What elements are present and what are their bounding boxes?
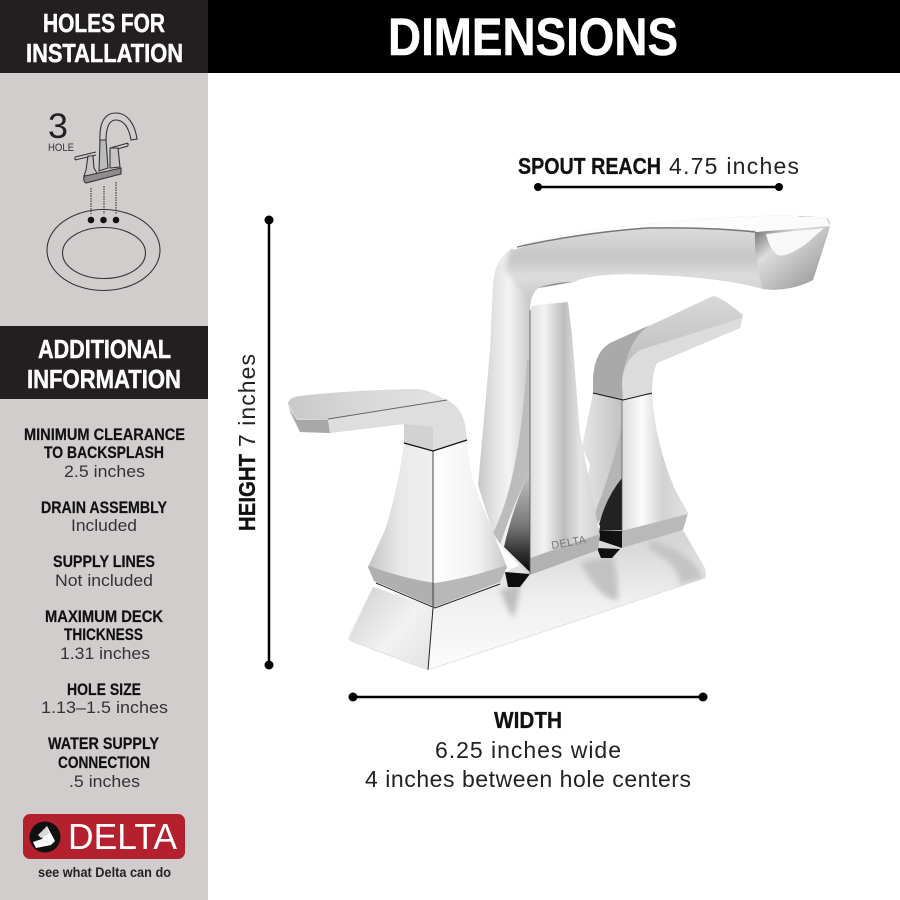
- label: height: 7 inches: [234, 354, 260, 447]
- right handle: [593, 296, 743, 400]
- text block: additional information list: THICKNESS: [64, 626, 143, 644]
- arrow: spout reach dimension line: [534, 183, 783, 191]
- header: holes for installation: [0, 0, 208, 73]
- arrow: width dimension line: [348, 692, 708, 702]
- header: additional information: INFORMATION: [27, 364, 181, 394]
- faucet illustration: [288, 205, 830, 670]
- header: additional information: [0, 326, 208, 399]
- label: width: 6.25 inches wide: [435, 737, 621, 763]
- header: holes for installation: HOLES FOR: [43, 8, 165, 38]
- text block: additional information list: HOLE SIZE: [67, 681, 141, 699]
- left base cone: [364, 440, 510, 610]
- text block: additional information list: TO BACKSPLASH: [44, 444, 164, 462]
- header: additional information: ADDITIONAL: [38, 334, 171, 364]
- text block: additional information list: DRAIN ASSEMBLY: [41, 499, 167, 517]
- text block: additional information list: 1.31 inches: [60, 645, 150, 663]
- header: dimensions bar: DIMENSIONS: [388, 8, 678, 67]
- label: width: 4 inches between hole centers: [365, 766, 691, 792]
- label: width: [365, 707, 691, 792]
- text block: additional information list: WATER SUPPLY: [48, 735, 159, 753]
- label: spout reach: [518, 153, 799, 179]
- logo: delta: see what Delta can do: [38, 865, 171, 880]
- arrow: height dimension line: [264, 216, 274, 670]
- header: dimensions bar: [208, 0, 900, 73]
- label: spout reach: SPOUT REACH: [518, 153, 661, 179]
- label: spout reach: 4.75 inches: [669, 153, 799, 179]
- text block: additional information list: 1.13–1.5 inches: [41, 699, 168, 717]
- label: height: HEIGHT: [234, 454, 260, 531]
- panel: sidebar background: [0, 0, 208, 900]
- label: height: [234, 354, 260, 531]
- text block: additional information list: Included: [71, 517, 137, 535]
- text block: additional information list: [24, 426, 185, 791]
- text block: additional information list: CONNECTION: [58, 754, 150, 772]
- icon: three hole faucet and sink: HOLE: [48, 142, 74, 154]
- logo: delta: [23, 814, 185, 880]
- left handle: [288, 389, 467, 451]
- right base cone: [582, 393, 690, 550]
- text block: additional information list: MINIMUM CLEARANCE: [24, 426, 185, 444]
- text block: additional information list: 2.5 inches: [64, 463, 145, 481]
- logo: delta: DELTA: [68, 816, 177, 857]
- header: holes for installation: INSTALLATION: [26, 38, 183, 68]
- text block: additional information list: MAXIMUM DECK: [45, 608, 163, 626]
- deck plate: [348, 530, 706, 670]
- label: width: WIDTH: [494, 707, 562, 733]
- icon: three hole faucet and sink: [47, 107, 160, 290]
- center body: DELTA: [550, 534, 588, 552]
- icon: three hole faucet and sink: 3: [48, 107, 68, 146]
- center body: [530, 302, 600, 576]
- text block: additional information list: .5 inches: [69, 773, 140, 791]
- text block: additional information list: Not included: [55, 572, 153, 590]
- spout: [478, 205, 830, 575]
- text block: additional information list: SUPPLY LINES: [53, 553, 155, 571]
